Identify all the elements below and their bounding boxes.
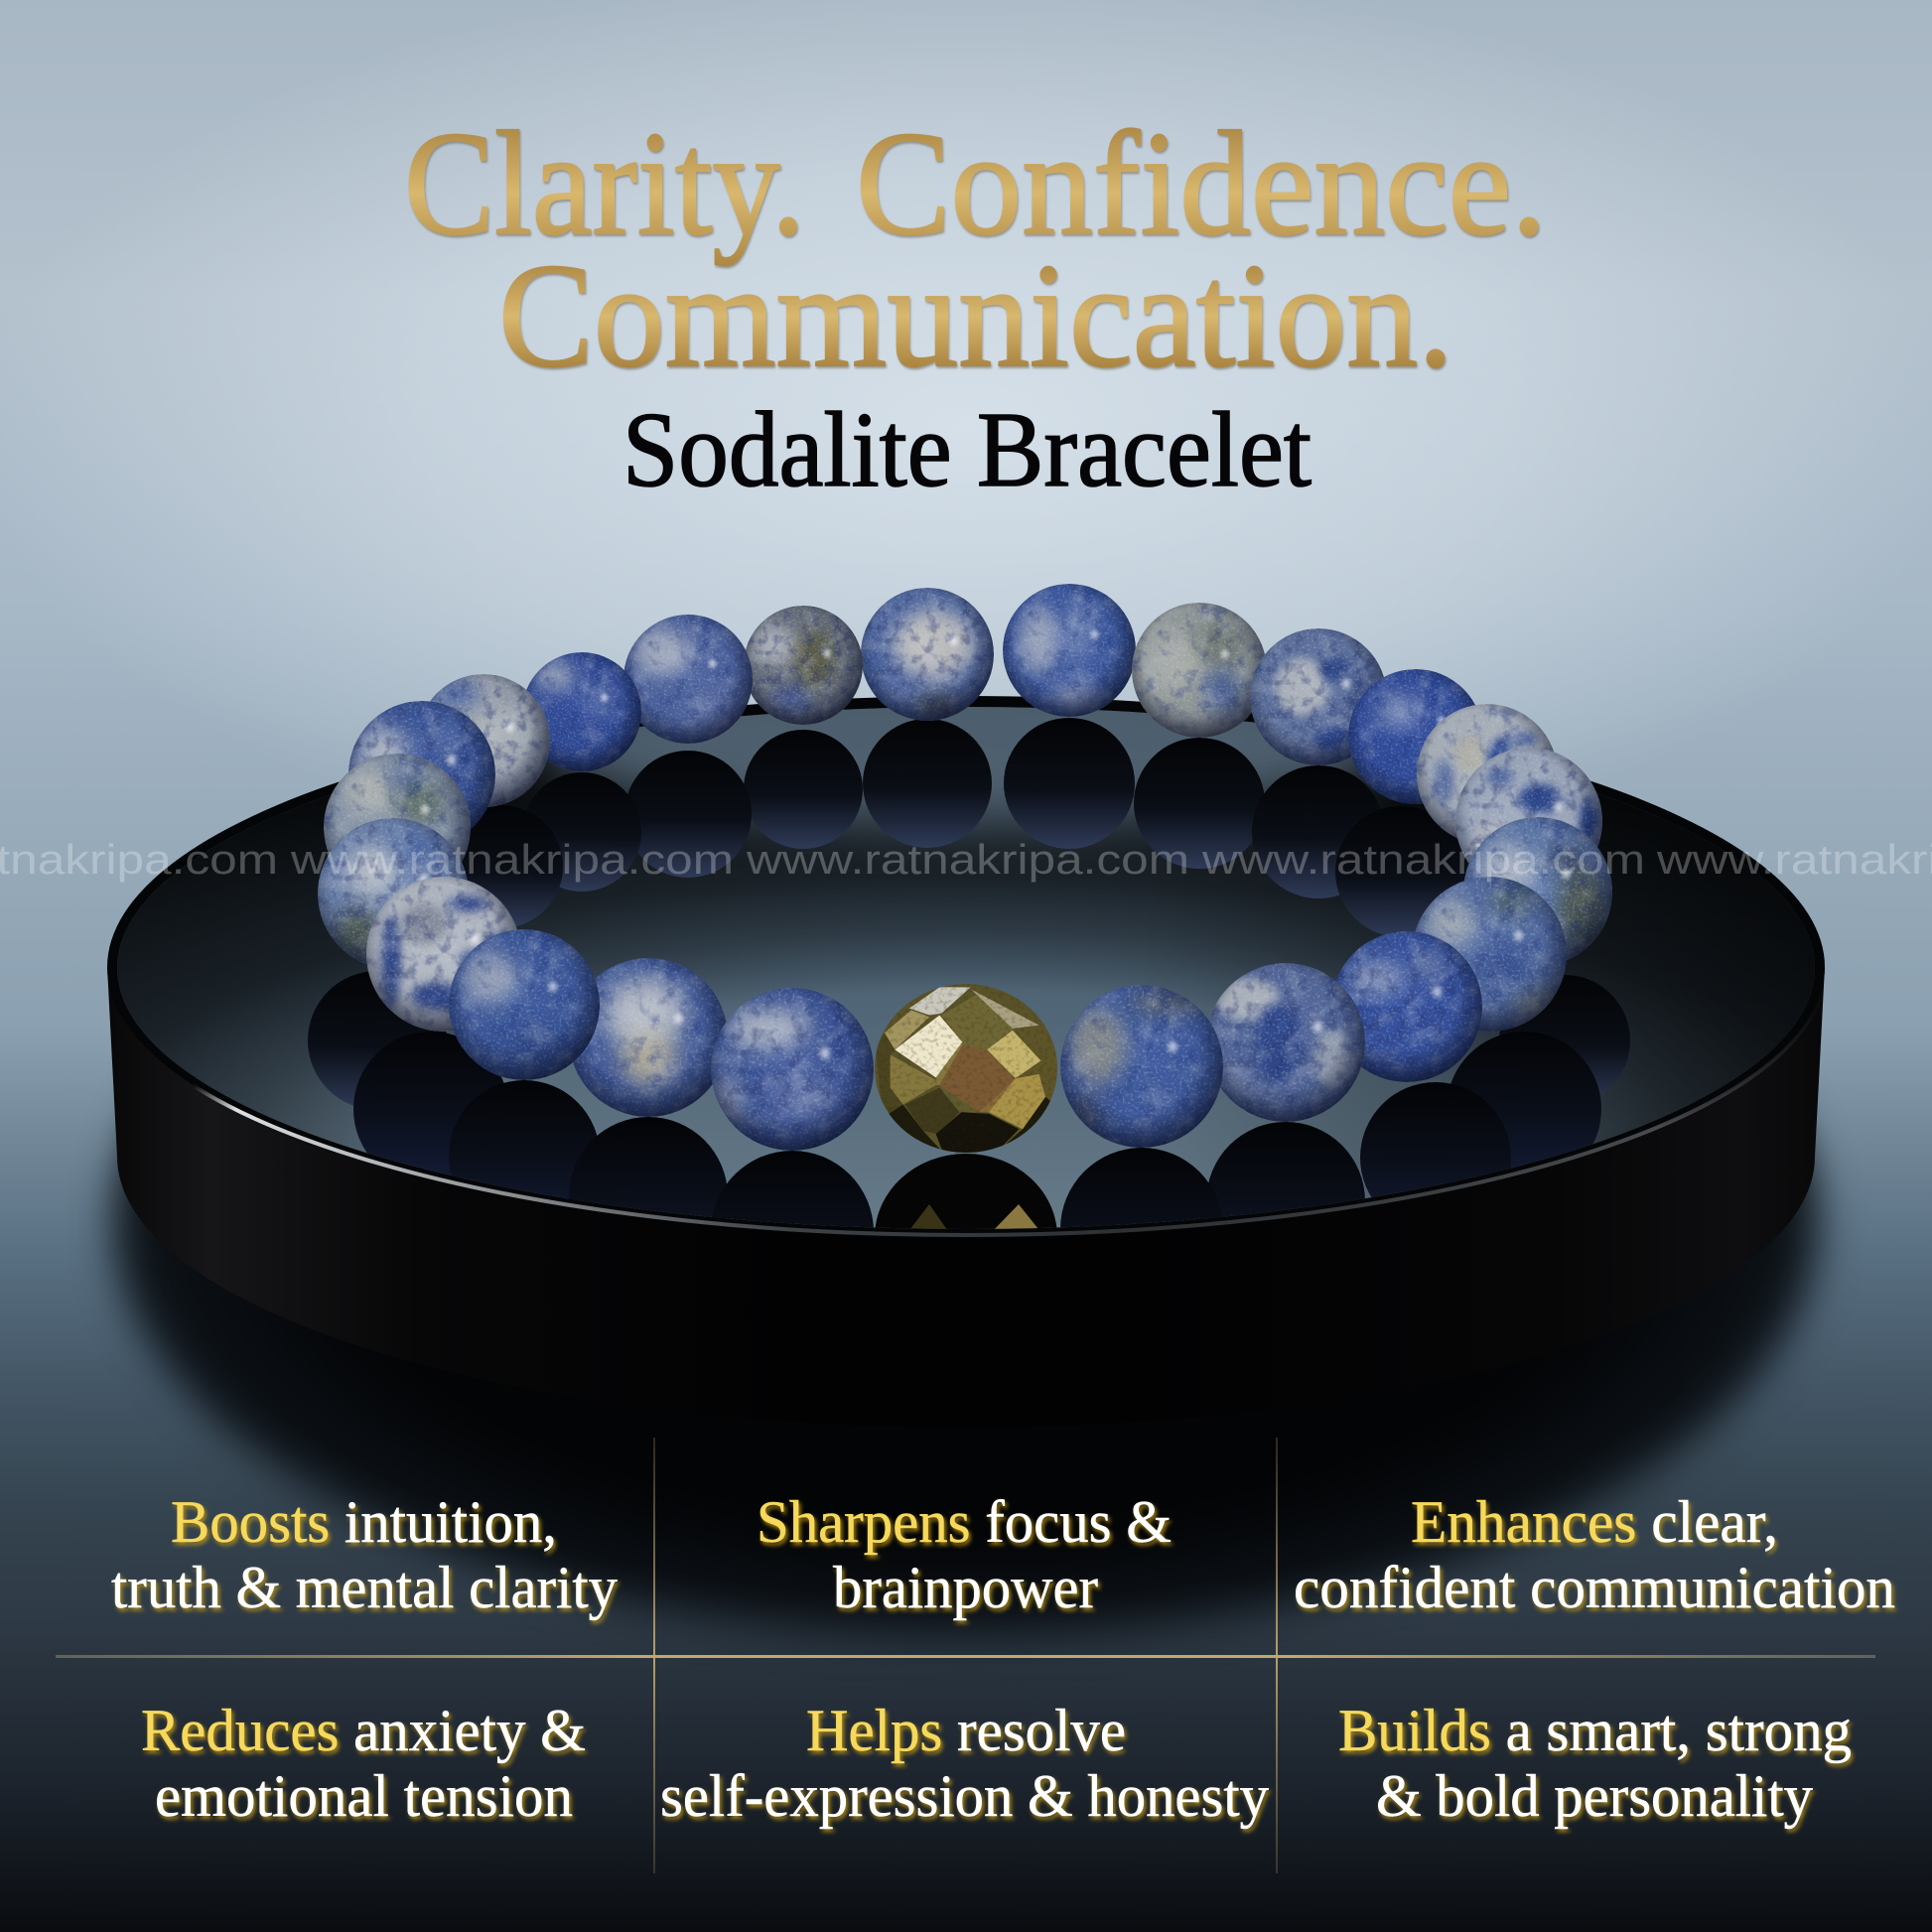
bead [1412, 877, 1567, 1032]
bead [744, 606, 863, 725]
title: gold headline: Communication. [498, 233, 1453, 398]
title: gold headline: Clarity. [404, 101, 805, 266]
bead [1331, 931, 1482, 1082]
title: gold headline: Confidence. [856, 101, 1547, 266]
benefit: enhances: confident communication [1294, 1555, 1895, 1620]
bead [449, 929, 600, 1080]
bead [1463, 817, 1612, 966]
bead [711, 988, 874, 1151]
bead [1132, 603, 1267, 738]
benefit: builds: & bold personality [1376, 1763, 1813, 1829]
benefit: reduces [141, 1698, 586, 1829]
bead [860, 588, 994, 721]
benefit: reduces: emotional tension [155, 1763, 573, 1829]
benefit: boosts [111, 1489, 618, 1620]
title: gold headline [404, 101, 1547, 398]
display disc: black glossy plinth [107, 696, 1825, 1340]
benefit: sharpens [757, 1489, 1172, 1620]
benefit: boosts: Boosts intuition, [171, 1489, 557, 1555]
repeating website watermark: www.ratnakripa.com [290, 836, 734, 883]
dark mirrored reflection of the display disc below it [112, 804, 1820, 1638]
benefit: enhances: Enhances clear, [1411, 1489, 1778, 1555]
benefits grid text [111, 1489, 1895, 1829]
disc side wall [107, 967, 1825, 1428]
bead [1060, 985, 1223, 1148]
benefit: helps: Helps resolve [806, 1698, 1126, 1763]
reflection of pyrite bead [876, 1154, 1056, 1229]
bead [1003, 584, 1136, 717]
pyrite faceted centre bead [875, 984, 1057, 1153]
bead [623, 615, 753, 744]
bead [1250, 628, 1387, 765]
repeating website watermark [0, 836, 1932, 883]
subtitle: Sodalite Bracelet [622, 391, 1311, 509]
bead [348, 701, 495, 848]
bead [1206, 963, 1365, 1122]
mirror reflections of the beads on the disc [308, 718, 1630, 1229]
bead [1348, 669, 1483, 804]
bead [318, 818, 469, 969]
repeating website watermark: www.ratnakripa.com [1201, 836, 1645, 883]
disc top face [117, 707, 1815, 1229]
disc outer rim band [107, 696, 1825, 1238]
bead [324, 754, 471, 900]
benefit: builds: Builds a smart, strong [1338, 1698, 1852, 1763]
benefit: builds [1338, 1698, 1852, 1829]
bead [1417, 704, 1558, 845]
benefit: helps: self-expression & honesty [660, 1763, 1269, 1829]
benefit: sharpens: Sharpens focus & [757, 1489, 1172, 1555]
benefit: helps [660, 1698, 1269, 1829]
disc rim highlight [107, 970, 1825, 1235]
bead [366, 877, 521, 1032]
sodalite bead bracelet with pyrite centre bead [318, 584, 1612, 1153]
disc top face sky reflection [534, 707, 1382, 854]
bead [417, 674, 550, 807]
benefit: enhances [1294, 1489, 1895, 1620]
bead [1455, 748, 1602, 895]
benefits grid dividers [56, 1438, 1875, 1873]
benefit: sharpens: brainpower [833, 1555, 1098, 1620]
bead [569, 958, 728, 1117]
bead [522, 652, 641, 771]
benefit: reduces: Reduces anxiety & [141, 1698, 586, 1763]
benefit: boosts: truth & mental clarity [111, 1555, 618, 1620]
repeating website watermark: www.ratnakripa.com [746, 836, 1189, 883]
